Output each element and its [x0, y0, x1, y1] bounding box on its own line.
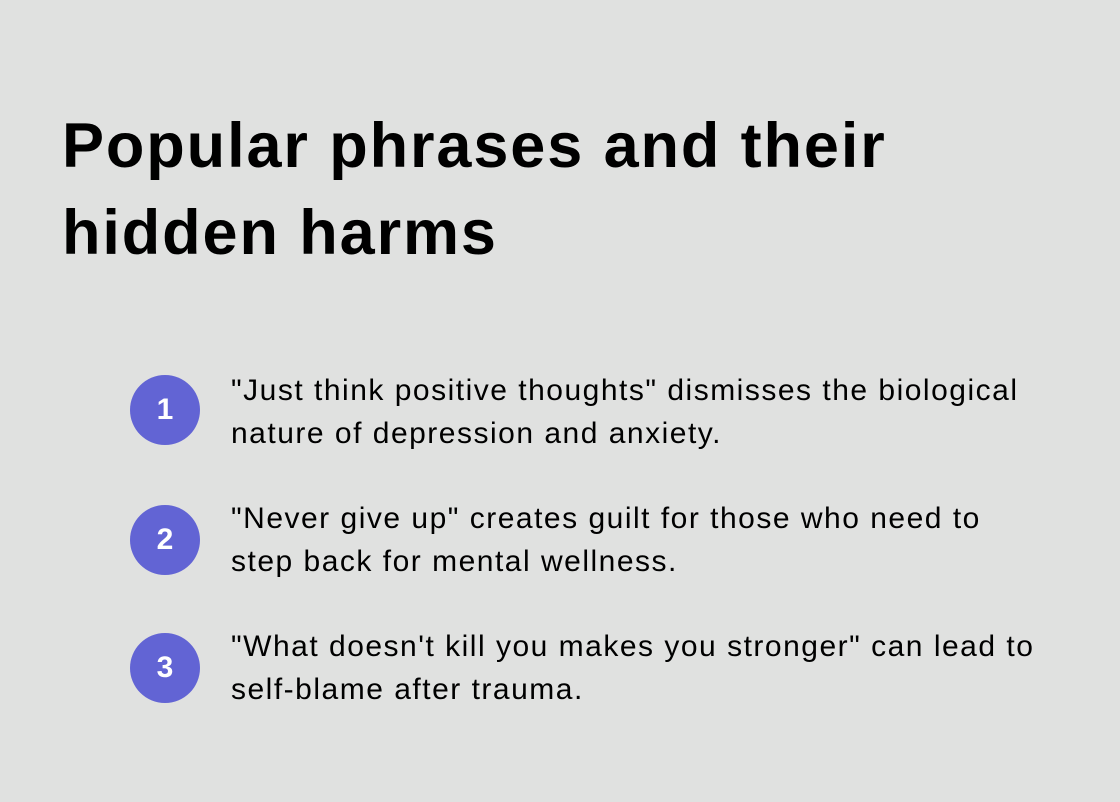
item 2 [130, 502, 981, 578]
icon: number 3: 3 [157, 651, 173, 684]
text 3 [231, 630, 1034, 706]
text 1 [231, 374, 1018, 450]
icon: number 3 [130, 633, 200, 703]
text 2 [231, 502, 981, 578]
title: Popular phrases and their [62, 111, 887, 181]
title: hidden harms [62, 198, 498, 268]
title [62, 111, 887, 268]
text 1: nature of depression and anxiety. [231, 417, 722, 450]
text 2: step back for mental wellness. [231, 545, 678, 578]
item 3 [130, 630, 1034, 706]
icon: number 2 [130, 505, 200, 575]
icon: number 2: 2 [157, 523, 173, 556]
text 3: "What doesn't kill you makes you stronger" can lead to [231, 630, 1034, 663]
item 1 [130, 374, 1018, 450]
text 3: self-blame after trauma. [231, 673, 584, 706]
icon: number 1: 1 [157, 393, 173, 426]
icon: number 1 [130, 375, 200, 445]
text 1: "Just think positive thoughts" dismisses the biological [231, 374, 1018, 407]
text 2: "Never give up" creates guilt for those who need to [231, 502, 981, 535]
